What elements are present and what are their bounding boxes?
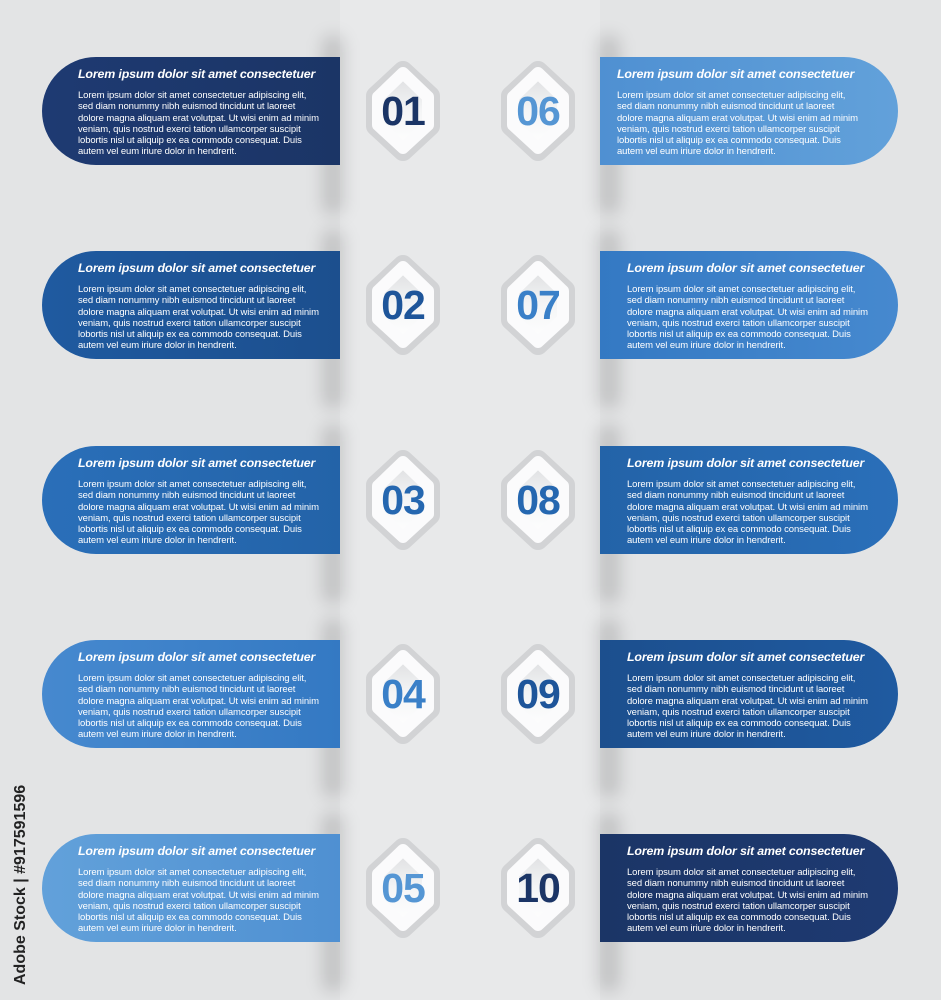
badge 09 xyxy=(501,644,575,744)
panel 03: lobortis nisl ut aliquip ex ea commodo consequat. Duis xyxy=(78,524,302,535)
panel 03: veniam, quis nostrud exerci tation ullamcorper suscipit xyxy=(78,513,301,524)
panel 05: lobortis nisl ut aliquip ex ea commodo consequat. Duis xyxy=(78,912,302,923)
badge 10 xyxy=(501,838,575,938)
panel 07 xyxy=(600,251,898,359)
panel 10: Lorem ipsum dolor sit amet consectetuer xyxy=(627,844,864,858)
panel 07: veniam, quis nostrud exerci tation ullamcorper suscipit xyxy=(627,318,850,329)
panel 10: veniam, quis nostrud exerci tation ullamcorper suscipit xyxy=(627,901,850,912)
panel 01: autem vel eum iriure dolor in hendrerit. xyxy=(78,146,237,157)
panel 01: dolore magna aliquam erat volutpat. Ut wisi enim ad minim xyxy=(78,113,319,124)
panel 09: Lorem ipsum dolor sit amet consectetuer xyxy=(627,650,864,664)
panel 02: veniam, quis nostrud exerci tation ullamcorper suscipit xyxy=(78,318,301,329)
panel 02: sed diam nonummy nibh euismod tincidunt ut laoreet xyxy=(78,295,295,306)
panel 06: Lorem ipsum dolor sit amet consectetuer adipiscing elit, xyxy=(617,90,845,101)
badge 01: 01 xyxy=(381,88,425,134)
panel 08: Lorem ipsum dolor sit amet consectetuer xyxy=(627,456,864,470)
panel 10: lobortis nisl ut aliquip ex ea commodo consequat. Duis xyxy=(627,912,851,923)
panel 10 xyxy=(600,834,898,942)
panel 05: veniam, quis nostrud exerci tation ullamcorper suscipit xyxy=(78,901,301,912)
panel 09: dolore magna aliquam erat volutpat. Ut wisi enim ad minim xyxy=(627,696,868,707)
panel 09: sed diam nonummy nibh euismod tincidunt ut laoreet xyxy=(627,684,844,695)
badge 02: 02 xyxy=(381,282,425,328)
badge 01 xyxy=(366,61,440,161)
badge 04 xyxy=(366,644,440,744)
panel 01: Lorem ipsum dolor sit amet consectetuer adipiscing elit, xyxy=(78,90,306,101)
panel 09: Lorem ipsum dolor sit amet consectetuer adipiscing elit, xyxy=(627,673,855,684)
panel 04: lobortis nisl ut aliquip ex ea commodo consequat. Duis xyxy=(78,718,302,729)
panel 01 xyxy=(42,57,340,165)
panel 06: veniam, quis nostrud exerci tation ullamcorper suscipit xyxy=(617,124,840,135)
panel 07: sed diam nonummy nibh euismod tincidunt ut laoreet xyxy=(627,295,844,306)
badge 08: 08 xyxy=(516,477,560,523)
panel 10: Lorem ipsum dolor sit amet consectetuer adipiscing elit, xyxy=(627,867,855,878)
panel 02: lobortis nisl ut aliquip ex ea commodo consequat. Duis xyxy=(78,329,302,340)
panel 06: lobortis nisl ut aliquip ex ea commodo consequat. Duis xyxy=(617,135,841,146)
panel 06: Lorem ipsum dolor sit amet consectetuer xyxy=(617,67,854,81)
badge 03 xyxy=(366,450,440,550)
panel 05: dolore magna aliquam erat volutpat. Ut wisi enim ad minim xyxy=(78,890,319,901)
panel 08: Lorem ipsum dolor sit amet consectetuer adipiscing elit, xyxy=(627,479,855,490)
panel 10: autem vel eum iriure dolor in hendrerit. xyxy=(627,923,786,934)
badge 06: 06 xyxy=(516,88,560,134)
panel 05: sed diam nonummy nibh euismod tincidunt ut laoreet xyxy=(78,878,295,889)
panel 02: Lorem ipsum dolor sit amet consectetuer xyxy=(78,261,315,275)
panel 01: sed diam nonummy nibh euismod tincidunt ut laoreet xyxy=(78,101,295,112)
panel 08: veniam, quis nostrud exerci tation ullamcorper suscipit xyxy=(627,513,850,524)
badge 08 xyxy=(501,450,575,550)
panel 02: dolore magna aliquam erat volutpat. Ut wisi enim ad minim xyxy=(78,307,319,318)
panel 02: autem vel eum iriure dolor in hendrerit. xyxy=(78,340,237,351)
panel 03: autem vel eum iriure dolor in hendrerit. xyxy=(78,535,237,546)
badge 04: 04 xyxy=(381,671,425,717)
panel 09 xyxy=(600,640,898,748)
panel 07: Lorem ipsum dolor sit amet consectetuer xyxy=(627,261,864,275)
panel 01: Lorem ipsum dolor sit amet consectetuer xyxy=(78,67,315,81)
panel 01: veniam, quis nostrud exerci tation ullamcorper suscipit xyxy=(78,124,301,135)
panel 03: Lorem ipsum dolor sit amet consectetuer adipiscing elit, xyxy=(78,479,306,490)
panel 03 xyxy=(42,446,340,554)
badge 10: 10 xyxy=(516,865,560,911)
panel 05 xyxy=(42,834,340,942)
panel 09: autem vel eum iriure dolor in hendrerit. xyxy=(627,729,786,740)
badge 07: 07 xyxy=(516,282,560,328)
panel 04: Lorem ipsum dolor sit amet consectetuer xyxy=(78,650,315,664)
badge 02 xyxy=(366,255,440,355)
panel 02 xyxy=(42,251,340,359)
panel 10: sed diam nonummy nibh euismod tincidunt ut laoreet xyxy=(627,878,844,889)
stock id text: Adobe Stock | #917591596 xyxy=(12,785,29,985)
panel 04: Lorem ipsum dolor sit amet consectetuer adipiscing elit, xyxy=(78,673,306,684)
panel 08: sed diam nonummy nibh euismod tincidunt ut laoreet xyxy=(627,490,844,501)
panel 08: lobortis nisl ut aliquip ex ea commodo consequat. Duis xyxy=(627,524,851,535)
panel 03: Lorem ipsum dolor sit amet consectetuer xyxy=(78,456,315,470)
panel 08 xyxy=(600,446,898,554)
badge 05: 05 xyxy=(381,865,425,911)
panel 04: veniam, quis nostrud exerci tation ullamcorper suscipit xyxy=(78,707,301,718)
panel 05: autem vel eum iriure dolor in hendrerit. xyxy=(78,923,237,934)
panel 09: veniam, quis nostrud exerci tation ullamcorper suscipit xyxy=(627,707,850,718)
badge 03: 03 xyxy=(381,477,425,523)
panel 07: lobortis nisl ut aliquip ex ea commodo consequat. Duis xyxy=(627,329,851,340)
panel 04: sed diam nonummy nibh euismod tincidunt ut laoreet xyxy=(78,684,295,695)
panel 04: autem vel eum iriure dolor in hendrerit. xyxy=(78,729,237,740)
panel 02: Lorem ipsum dolor sit amet consectetuer adipiscing elit, xyxy=(78,284,306,295)
panel 08: dolore magna aliquam erat volutpat. Ut wisi enim ad minim xyxy=(627,502,868,513)
panel 03: dolore magna aliquam erat volutpat. Ut wisi enim ad minim xyxy=(78,502,319,513)
panel 06: sed diam nonummy nibh euismod tincidunt ut laoreet xyxy=(617,101,834,112)
panel 01: lobortis nisl ut aliquip ex ea commodo consequat. Duis xyxy=(78,135,302,146)
panel 05: Lorem ipsum dolor sit amet consectetuer xyxy=(78,844,315,858)
badge 05 xyxy=(366,838,440,938)
panel 08: autem vel eum iriure dolor in hendrerit. xyxy=(627,535,786,546)
panel 06 xyxy=(600,57,898,165)
badge 07 xyxy=(501,255,575,355)
panel 07: Lorem ipsum dolor sit amet consectetuer adipiscing elit, xyxy=(627,284,855,295)
panel 05: Lorem ipsum dolor sit amet consectetuer adipiscing elit, xyxy=(78,867,306,878)
badge 09: 09 xyxy=(516,671,560,717)
panel 10: dolore magna aliquam erat volutpat. Ut wisi enim ad minim xyxy=(627,890,868,901)
panel 07: autem vel eum iriure dolor in hendrerit. xyxy=(627,340,786,351)
panel 07: dolore magna aliquam erat volutpat. Ut wisi enim ad minim xyxy=(627,307,868,318)
panel 04: dolore magna aliquam erat volutpat. Ut wisi enim ad minim xyxy=(78,696,319,707)
panel 03: sed diam nonummy nibh euismod tincidunt ut laoreet xyxy=(78,490,295,501)
panel 06: autem vel eum iriure dolor in hendrerit. xyxy=(617,146,776,157)
panel 09: lobortis nisl ut aliquip ex ea commodo consequat. Duis xyxy=(627,718,851,729)
panel 06: dolore magna aliquam erat volutpat. Ut wisi enim ad minim xyxy=(617,113,858,124)
badge 06 xyxy=(501,61,575,161)
panel 04 xyxy=(42,640,340,748)
